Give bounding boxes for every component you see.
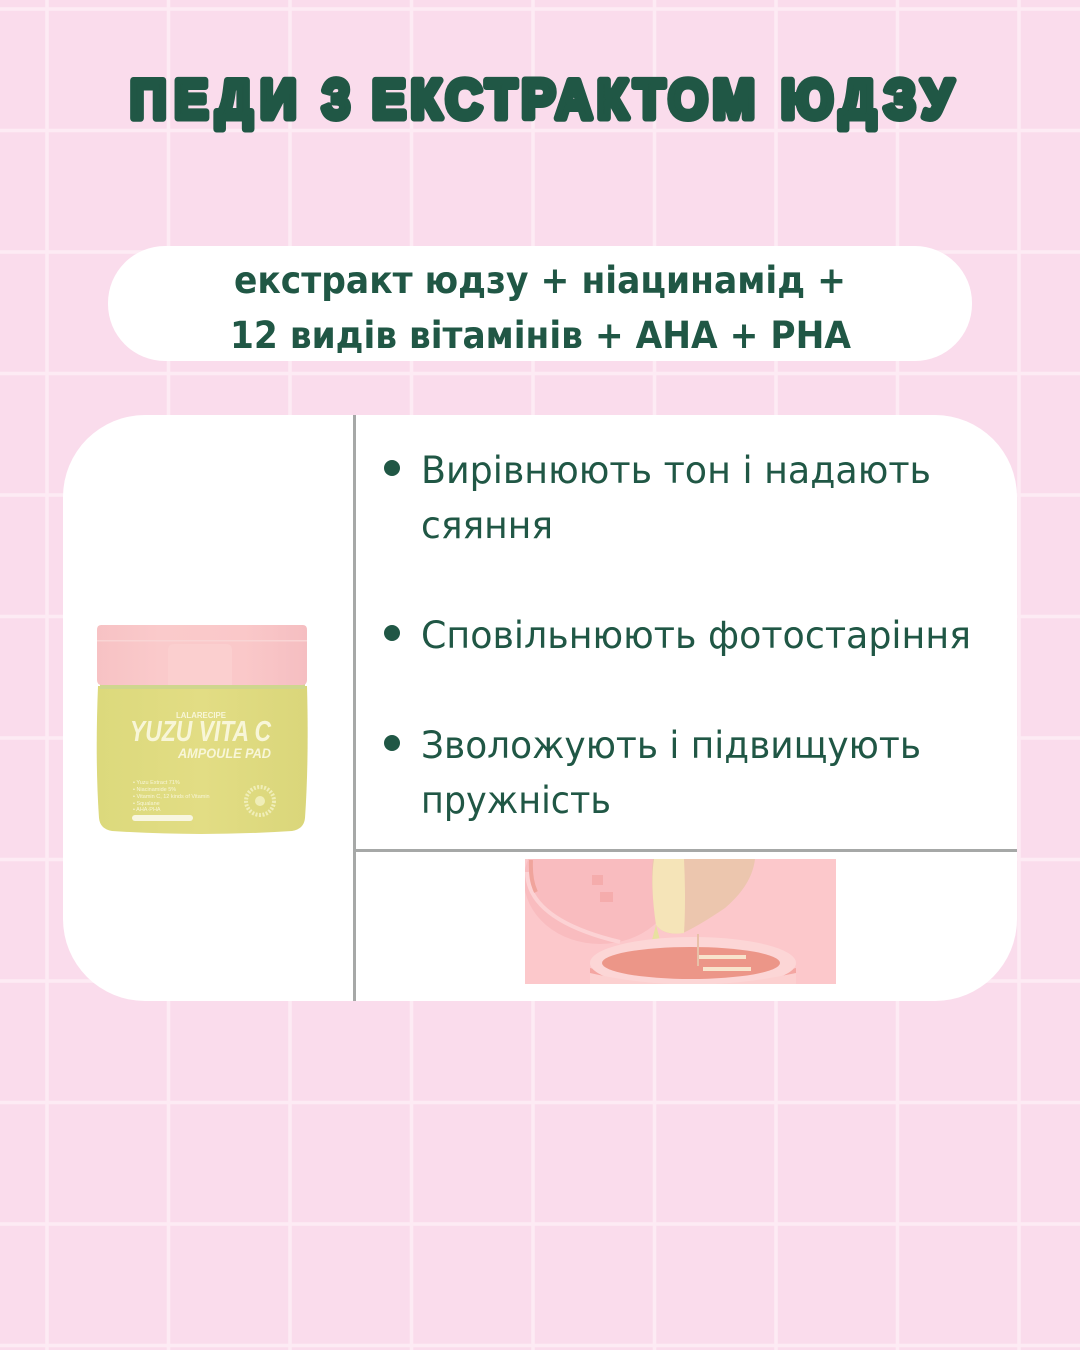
panel: product card <box>63 415 1017 1001</box>
ingredients line 2: 12 видів вітамінів + АНА + РНА <box>230 314 851 357</box>
vertical divider <box>353 415 356 1001</box>
icon: product jar: • Yuzu Extract 71% <box>133 780 180 786</box>
panel: ingredients pill <box>108 246 972 361</box>
icon: product jar: • Squalane <box>133 801 160 807</box>
title: ПЕДИ <box>130 69 297 130</box>
title: ЕКСТРАКТОМ <box>372 69 755 130</box>
icon: product jar: • AHA·PHA <box>133 807 161 813</box>
bullet 2: Сповільнюють фотостаріння <box>421 614 971 657</box>
title: З <box>322 68 350 130</box>
icon: product jar: • Vitamin C, 12 kinds of Vitamin <box>133 794 210 800</box>
title <box>130 68 954 130</box>
bullet 1: Вирівнюють тон і надають <box>421 449 931 492</box>
icon: product jar <box>97 625 308 834</box>
horizontal divider <box>356 849 1017 852</box>
bullet 1: сяяння <box>421 504 553 547</box>
bullet 3: Зволожують і підвищують <box>421 724 921 767</box>
photo: open jar with pad <box>525 859 836 984</box>
bullet 3 <box>384 724 921 822</box>
bullet 1 <box>384 449 931 547</box>
icon: product jar: YUZU VITA C <box>130 716 272 748</box>
bullet list <box>384 449 971 822</box>
ingredients line 1: екстракт юдзу + ніацинамід + <box>234 259 846 302</box>
icon: product jar: • Niacinamide 5% <box>133 787 176 793</box>
bullet 3: пружність <box>421 779 611 822</box>
icon: product jar: LALARECIPE <box>176 711 227 720</box>
title: ЮДЗУ <box>781 69 954 130</box>
icon: product jar: AMPOULE PAD <box>177 745 271 761</box>
